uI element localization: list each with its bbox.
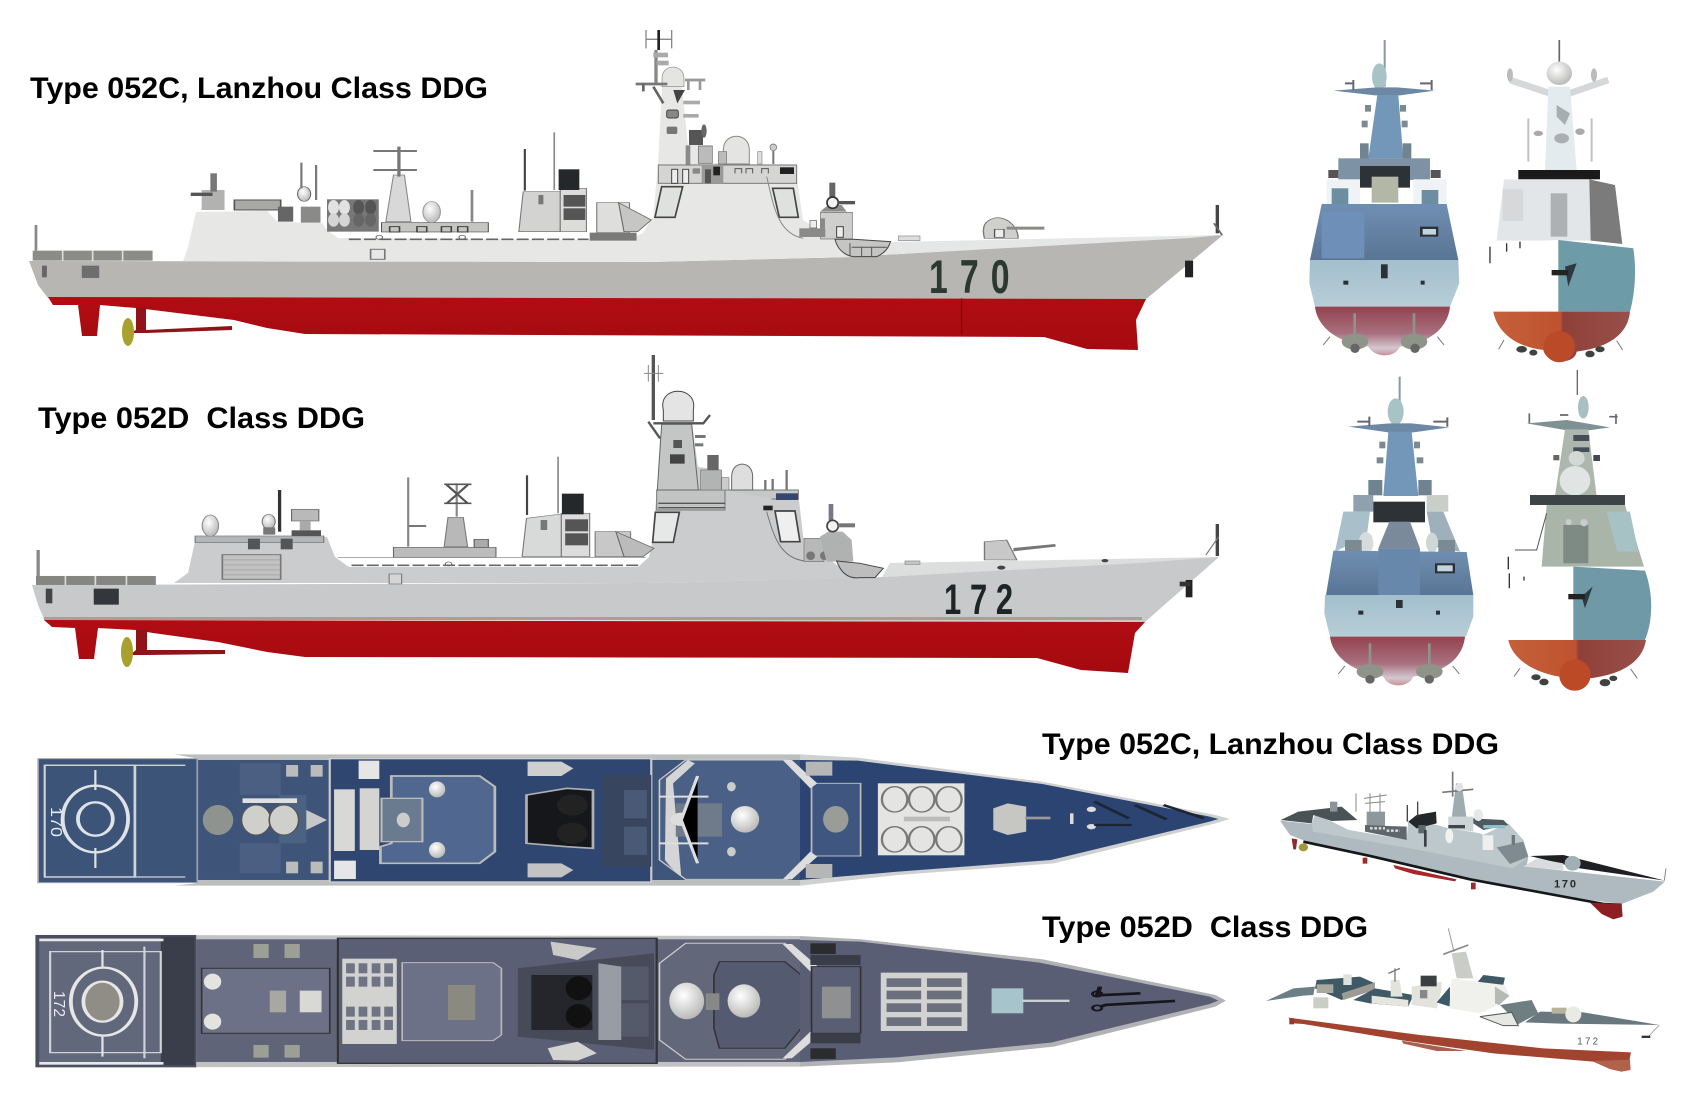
plan view: Type 052C deck [38, 754, 1230, 886]
caption: Type 052D perspective: Type 052D Class DDG [1042, 911, 1368, 944]
aft superstructure [1315, 977, 1375, 1000]
deck forward section [783, 754, 1230, 886]
label: 170 on helicopter deck: 170 [47, 807, 64, 837]
icon: propeller [1299, 843, 1308, 851]
main gun and bow fittings [984, 524, 1219, 597]
label: 172 on helicopter deck: 172 [50, 991, 67, 1017]
aft and midship equipment [33, 132, 651, 278]
hull number: 172 [1577, 1036, 1598, 1047]
red boot stripe and bulb [1288, 1018, 1631, 1072]
main tower, radome and close-in weapon [636, 30, 920, 257]
plan view: Type 052D deck [35, 935, 1226, 1067]
bow view 052C [1484, 40, 1635, 362]
aft and midship equipment [36, 457, 654, 605]
funnel block and antennas [1408, 812, 1437, 828]
ship: Type 052D side elevation [32, 355, 1219, 673]
hull: grey topsides [32, 557, 1219, 622]
icon: propeller [121, 637, 133, 667]
main gun and bow fittings [962, 205, 1222, 335]
aft flight deck [1266, 987, 1315, 1001]
foredeck [1530, 855, 1665, 881]
deck aft section [38, 754, 801, 886]
foredeck wedge [882, 557, 1219, 577]
hull number 172: 172 [944, 575, 1013, 623]
icon: propeller [122, 318, 134, 346]
forward weapon block [1497, 842, 1528, 864]
rear and front views: Type 052C [1309, 40, 1635, 362]
forward weapon block [1500, 1000, 1538, 1025]
midship superstructure [1353, 988, 1413, 1007]
aft deck and equipment [1281, 807, 1357, 823]
deck aft section [35, 935, 801, 1067]
hull number: 170 [1554, 878, 1576, 890]
funnel block [1412, 982, 1442, 1008]
underwater red details [1292, 838, 1297, 849]
superstructure: grey block [174, 423, 860, 583]
main tower and mast [1477, 975, 1505, 985]
main mast and tower [1452, 783, 1467, 818]
title: Type 052D side profile: Type 052D Class DDG [38, 402, 365, 435]
title: Type 052C side profile: Type 052C, Lanzhou Class DDG [30, 72, 488, 105]
foredeck and gun [1525, 1012, 1659, 1025]
stern view 052D [1324, 377, 1473, 685]
hull: grey topsides [29, 235, 1223, 300]
main tower, radome and close-in weapon [644, 355, 920, 578]
deck forward section [783, 936, 1226, 1067]
caption: Type 052C perspective: Type 052C, Lanzhou Class DDG [1042, 728, 1499, 761]
superstructure: white block [183, 87, 853, 262]
hull number 170: 170 [929, 251, 1010, 303]
stern view 052C [1309, 40, 1459, 355]
hull: red underbody [48, 297, 1146, 350]
rear and front views: Type 052D [1324, 370, 1651, 691]
hull: red underbody [44, 620, 1145, 673]
perspective model: Type 052D [1266, 928, 1659, 1072]
bow view 052D [1505, 370, 1651, 691]
hull and superstructure sides [1280, 815, 1665, 904]
foredeck wedge [882, 235, 1222, 255]
keel stripe [1303, 842, 1622, 905]
perspective model: Type 052C [1280, 772, 1666, 919]
ship: Type 052C side elevation [29, 30, 1223, 350]
white hull [1267, 996, 1658, 1053]
